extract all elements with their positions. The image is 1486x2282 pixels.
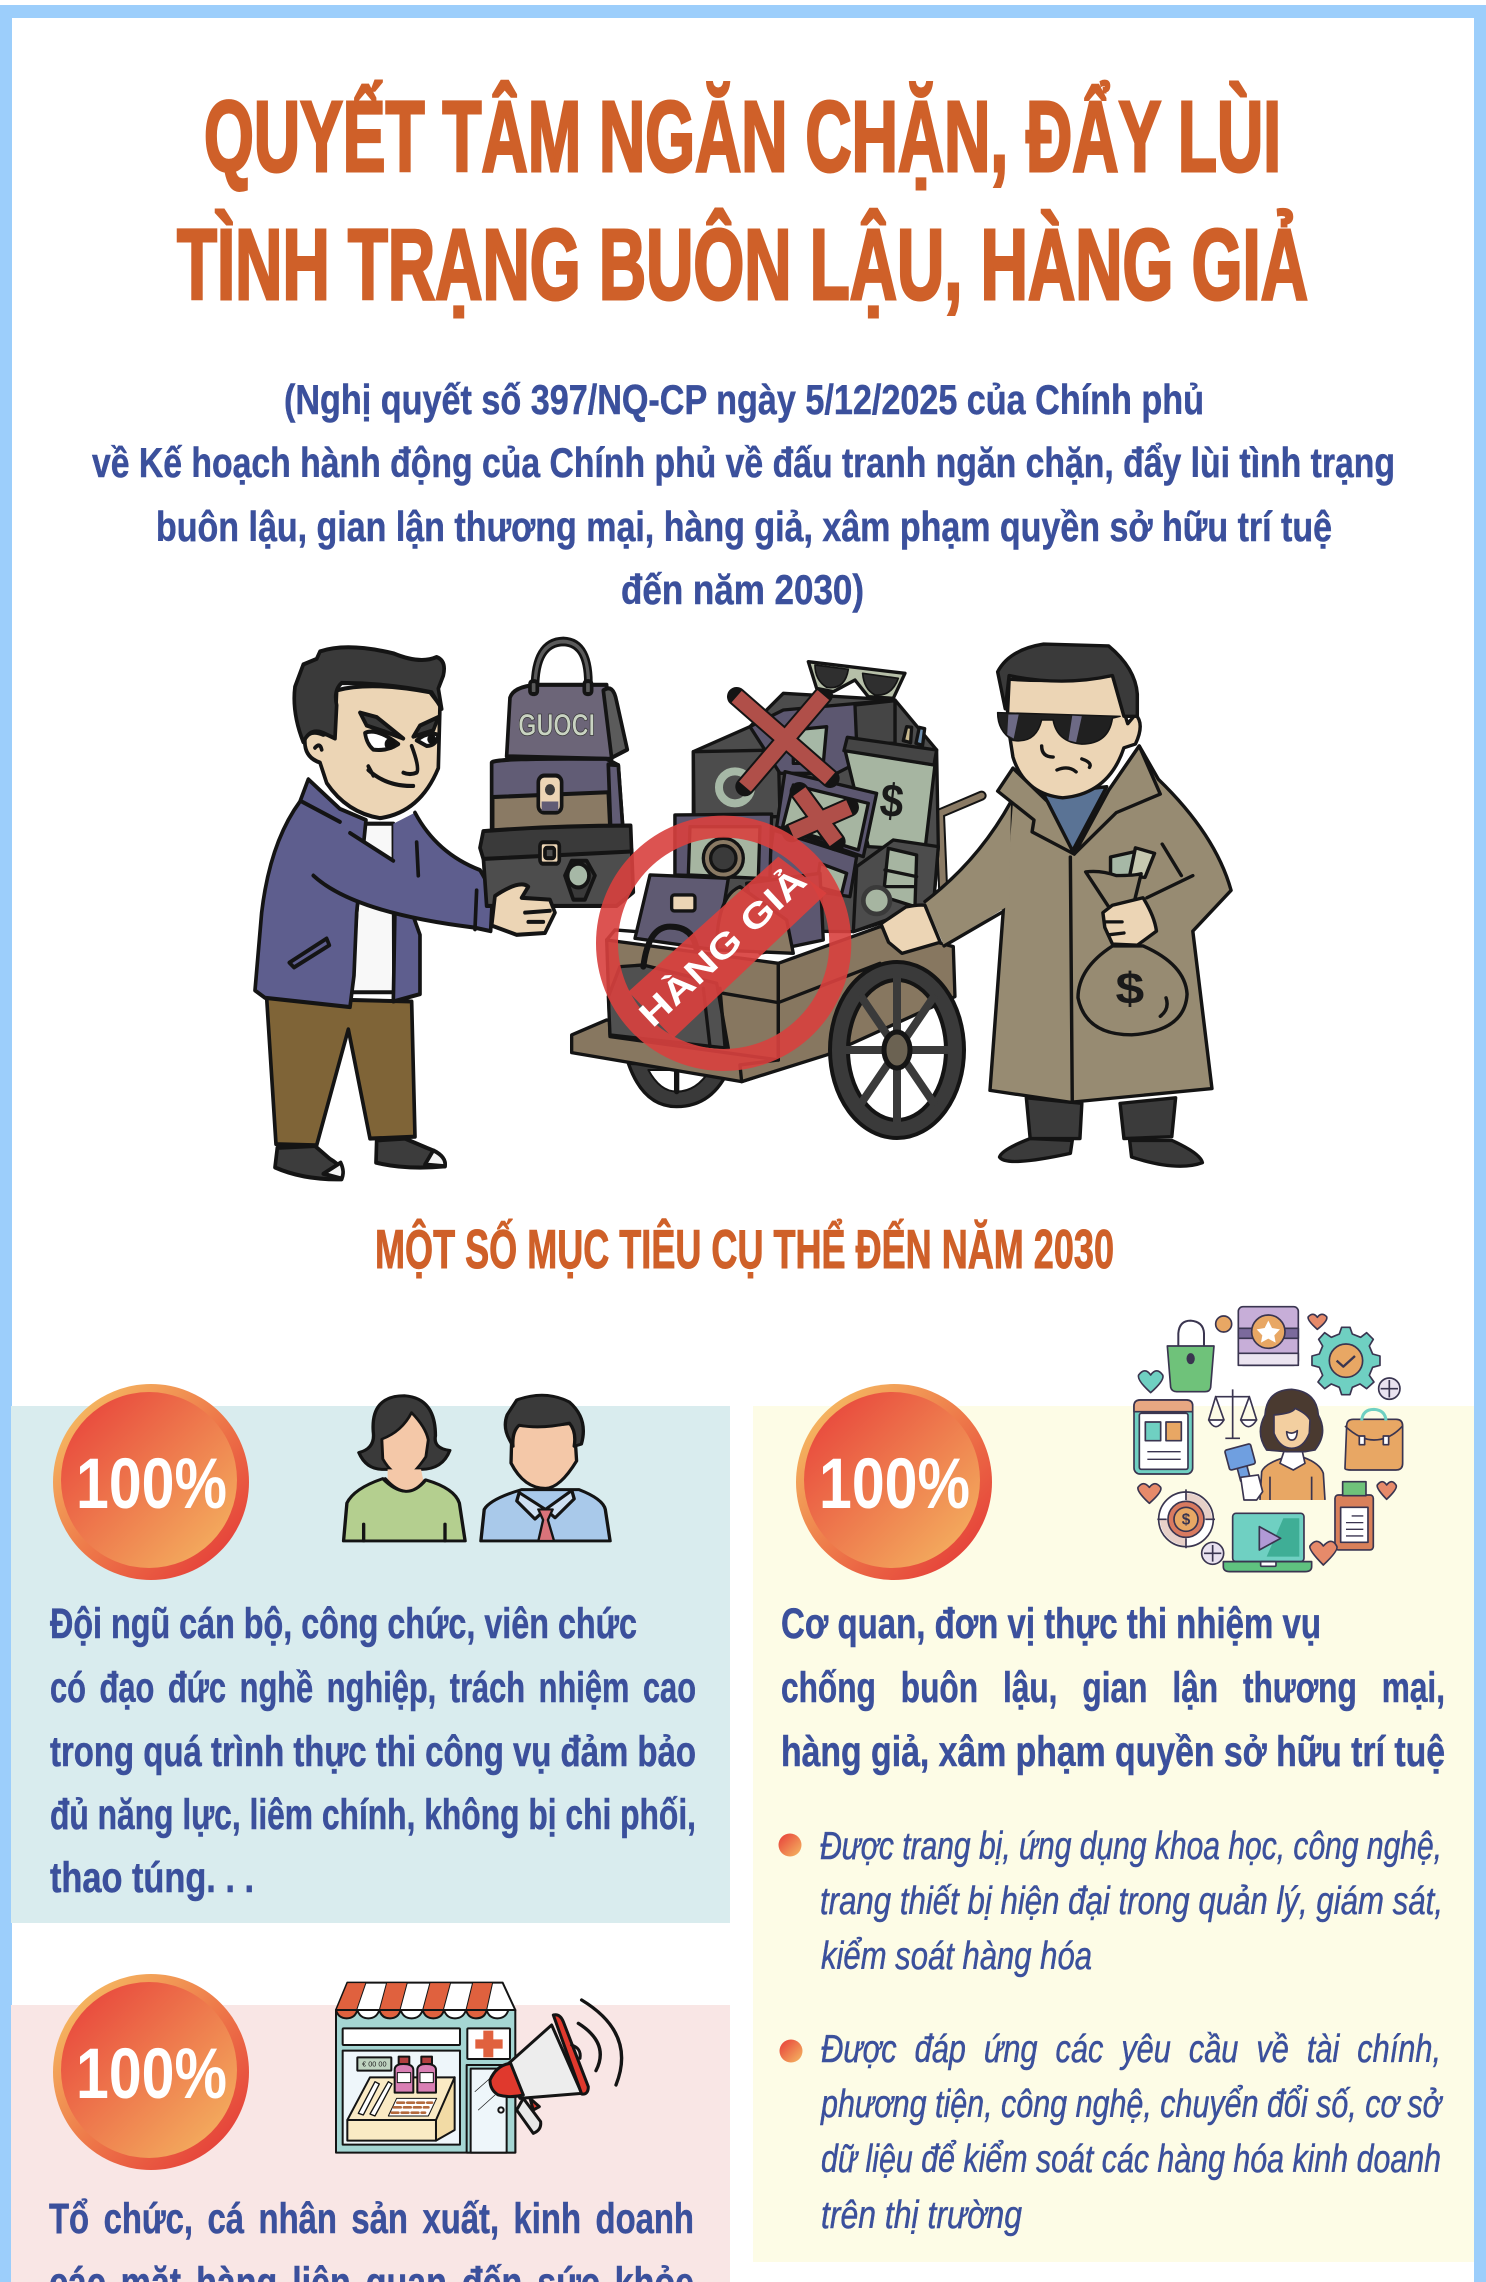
badge: 100% civil servants bbox=[53, 1384, 249, 1580]
panel: producers background bbox=[11, 2005, 730, 2282]
text: enforcement agencies target: Cơ quan, đơn vị thực thi nhiệm vụ bbox=[781, 1600, 1321, 1648]
icon: pharmacy store with megaphone: € 00 00 bbox=[362, 2060, 387, 2069]
badge: 100% civil servants: 100% bbox=[76, 1445, 227, 1524]
icon: civil servants bbox=[344, 1395, 610, 1541]
bullet: finance and digital data bbox=[780, 2028, 1444, 2237]
stamp: HÀNG GIẢ bbox=[607, 827, 840, 1060]
icon: pharmacy store with megaphone bbox=[336, 1983, 622, 2153]
cart with fake goods and stamp: $ bbox=[878, 774, 906, 828]
subtitle bbox=[92, 376, 1395, 613]
icon: enforcement cluster: $ bbox=[1182, 1512, 1191, 1529]
stamp: HÀNG GIẢ: HÀNG GIẢ bbox=[631, 860, 814, 1035]
cart with fake goods and stamp bbox=[572, 662, 982, 1107]
text: civil servants target: thao túng. . . bbox=[50, 1854, 254, 1902]
left man with stacked bags bbox=[255, 641, 633, 1179]
panel: civil servants background bbox=[11, 1406, 730, 1923]
bullet: equipment and technology: kiểm soát hàng hóa bbox=[821, 1935, 1092, 1978]
text: civil servants target: đủ năng lực, liêm chính, không bị chi phối, bbox=[50, 1791, 696, 1839]
subtitle: (Nghị quyết số 397/NQ-CP ngày 5/12/2025 của Chính phủ bbox=[284, 376, 1204, 423]
text: civil servants target: Đội ngũ cán bộ, công chức, viên chức bbox=[50, 1600, 637, 1648]
badge: 100% producers: 100% bbox=[76, 2035, 227, 2114]
bullet: finance and digital data: trên thị trường bbox=[821, 2194, 1022, 2237]
trench coat man with money bag bbox=[881, 644, 1231, 1166]
panel: enforcement agencies background bbox=[753, 1406, 1474, 2262]
text: civil servants target bbox=[50, 1600, 696, 1902]
text: producers target bbox=[49, 2195, 694, 2282]
badge: 100% producers bbox=[53, 1974, 249, 2170]
text: civil servants target: có đạo đức nghề nghiệp, trách nhiệm cao bbox=[50, 1664, 696, 1712]
text: producers target: Tổ chức, cá nhân sản xuất, kinh doanh bbox=[49, 2195, 694, 2243]
bullet: equipment and technology bbox=[778, 1825, 1443, 1978]
illustration: counterfeit goods trade bbox=[255, 641, 1231, 1179]
cart wheel bbox=[839, 971, 955, 1129]
title bbox=[177, 80, 1308, 321]
badge: 100% enforcement agencies bbox=[796, 1384, 992, 1580]
subtitle: đến năm 2030) bbox=[621, 566, 864, 613]
text: enforcement agencies target bbox=[781, 1600, 1445, 1776]
badge: 100% enforcement agencies: 100% bbox=[819, 1445, 970, 1524]
trench coat man with money bag: $ bbox=[1116, 963, 1144, 1013]
section heading: MỘT SỐ MỤC TIÊU CỤ THỂ ĐẾN NĂM 2030 bbox=[375, 1218, 1114, 1280]
text: civil servants target: trong quá trình thực thi công vụ đảm bảo bbox=[50, 1728, 696, 1776]
icon: enforcement cluster bbox=[1134, 1307, 1403, 1572]
left man with stacked bags: GUOCI bbox=[518, 708, 595, 743]
